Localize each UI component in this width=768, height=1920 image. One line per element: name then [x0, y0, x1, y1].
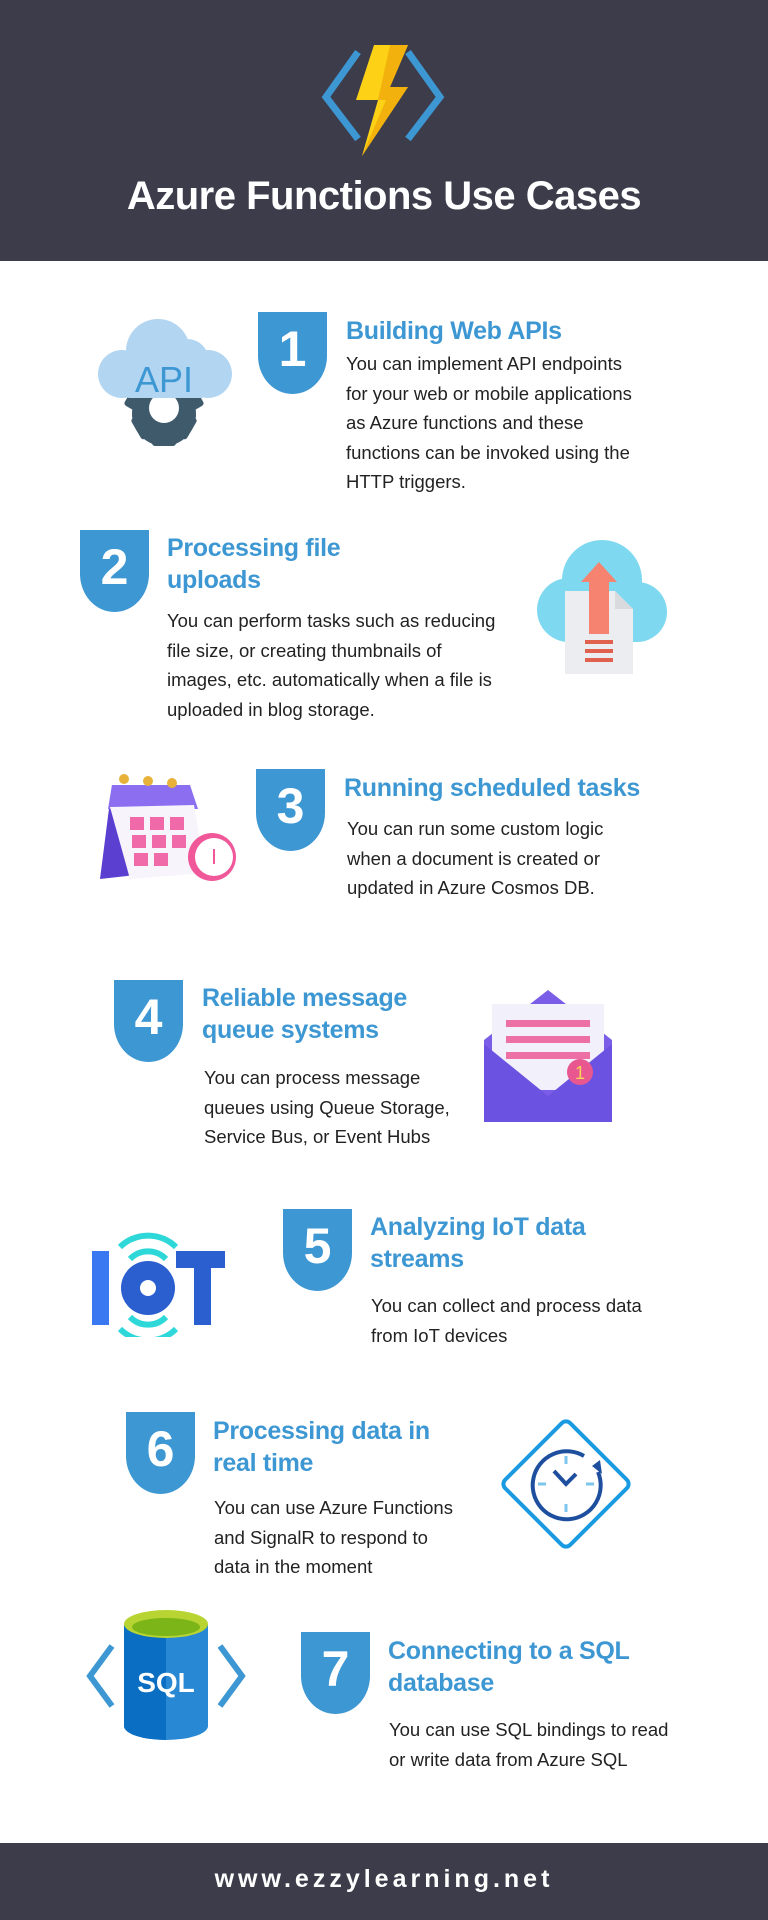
title: Azure Functions Use Cases: [127, 174, 641, 218]
section 1: [98, 319, 232, 446]
text 3: updated in Azure Cosmos DB.: [347, 877, 595, 898]
text 4: [204, 1067, 450, 1147]
text 2: file size, or creating thumbnails of: [167, 640, 442, 660]
text 4: queues using Queue Storage,: [204, 1096, 450, 1118]
text 3: You can run some custom logic: [347, 818, 603, 839]
text 3: [347, 818, 603, 898]
icon: envelope: [484, 990, 612, 1122]
heading 6: Processing data in: [213, 1417, 430, 1445]
footer url: www.ezzylearning.net: [215, 1865, 553, 1893]
text 7: You can use SQL bindings to read: [389, 1719, 668, 1740]
badge 1: [258, 312, 327, 394]
badge 6: [126, 1412, 195, 1494]
header: [0, 0, 768, 261]
text 6: data in the moment: [214, 1556, 372, 1577]
text 1: functions can be invoked using the: [346, 442, 630, 462]
heading 5: Analyzing IoT data: [370, 1213, 585, 1241]
text 1: You can implement API endpoints: [346, 353, 622, 374]
badge 3: [256, 769, 325, 851]
heading 4: queue systems: [202, 1016, 379, 1044]
heading 3: Running scheduled tasks: [344, 774, 640, 802]
icon: API cloud gear: API: [135, 359, 193, 400]
heading 2: Processing file: [167, 534, 340, 562]
badge 4: [114, 980, 183, 1062]
heading 7: database: [388, 1669, 494, 1697]
text 5: You can collect and process data: [371, 1295, 642, 1316]
text 3: when a document is created or: [347, 848, 600, 868]
text 5: from IoT devices: [371, 1324, 507, 1346]
badge 7: 7: [322, 1641, 349, 1697]
heading 7: Connecting to a SQL: [388, 1637, 630, 1665]
text 5: [371, 1295, 642, 1346]
text 6: [214, 1497, 453, 1577]
heading 6: real time: [213, 1449, 313, 1477]
icon: SQL database: SQL: [137, 1667, 195, 1698]
text 4: Service Bus, or Event Hubs: [204, 1126, 430, 1147]
icon: clock diamond: [501, 1419, 631, 1549]
footer: [0, 1843, 768, 1920]
heading 2: [167, 534, 340, 594]
text 7: or write data from Azure SQL: [389, 1748, 628, 1770]
text 6: You can use Azure Functions: [214, 1497, 453, 1518]
text 2: uploaded in blog storage.: [167, 698, 375, 720]
text 1: [346, 353, 632, 492]
heading 1: Building Web APIs: [346, 317, 562, 345]
heading 2: uploads: [167, 566, 261, 594]
icon: azure functions logo: [322, 45, 444, 156]
heading 4: [202, 984, 407, 1044]
text 7: [389, 1719, 668, 1770]
text 2: images, etc. automatically when a file is: [167, 669, 492, 690]
badge 3: 3: [277, 778, 304, 834]
badge 1: 1: [279, 321, 306, 377]
text 1: HTTP triggers.: [346, 471, 466, 492]
text 4: You can process message: [204, 1067, 420, 1088]
icon: API cloud gear: [98, 319, 232, 446]
icon: calendar clock: [100, 774, 236, 881]
text 6: and SignalR to respond to: [214, 1526, 428, 1548]
badge 7: [301, 1632, 370, 1714]
badge 2: 2: [101, 539, 128, 595]
heading 7: [388, 1637, 630, 1697]
badge 4: 4: [135, 989, 162, 1045]
text 2: [167, 610, 495, 720]
heading 5: [370, 1213, 586, 1273]
badge 5: 5: [304, 1218, 331, 1274]
icon: envelope: 1: [575, 1063, 585, 1083]
text 1: for your web or mobile applications: [346, 382, 632, 404]
heading 6: [213, 1417, 430, 1477]
icon: SQL database: [86, 1610, 246, 1740]
badge 6: 6: [147, 1421, 174, 1477]
text 1: as Azure functions and these: [346, 412, 584, 433]
heading 4: Reliable message: [202, 984, 407, 1012]
heading 5: streams: [370, 1245, 464, 1273]
icon: cloud upload: [537, 540, 667, 674]
text 2: You can perform tasks such as reducing: [167, 610, 495, 631]
icon: IoT: [92, 1232, 225, 1337]
badge 5: [283, 1209, 352, 1291]
badge 2: [80, 530, 149, 612]
